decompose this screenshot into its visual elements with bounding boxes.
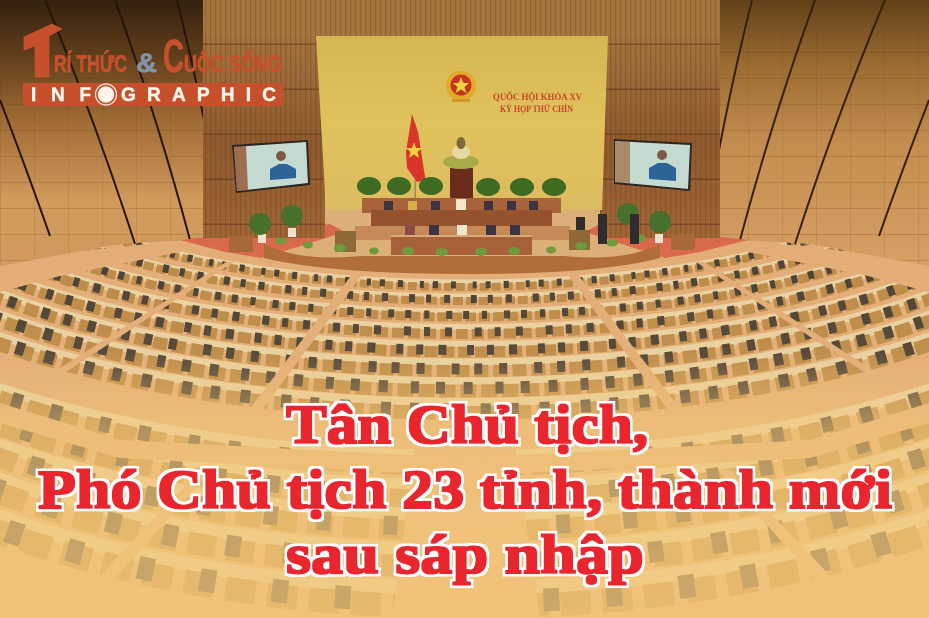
left video screen [232,140,310,193]
session heading on wall [493,90,582,114]
logo wordmark right: UỘC SỐNG [184,50,282,78]
right potted plants [617,203,695,250]
podium with bust and flowers [443,137,479,212]
golden back wall [316,36,608,210]
floor background [0,200,929,618]
session heading on wall: QUỐC HỘI KHÓA XV [493,90,582,103]
front curved rail [264,244,660,274]
logo O icon [96,84,116,105]
INF letters: INF [31,85,91,106]
lecterns [335,230,590,252]
presidium tables [355,198,570,255]
red carpet [180,224,748,258]
title: sau sáp nhập [286,524,644,585]
presidium officials [384,199,538,235]
national emblem [446,71,476,102]
flag of Vietnam [406,114,426,198]
logo: Tri Thuc & Cuoc Song [24,24,282,82]
right video screen [614,139,692,191]
logo wordmark left: RÍ THỨC [54,50,127,78]
logo large C: C [163,30,184,82]
GRAPHIC letters: GRAPHIC [121,85,276,106]
wooden top band [203,0,720,36]
session heading on wall: KỲ HỌP THỨ CHÍN [500,104,573,114]
stage floor [222,205,706,262]
wooden panel left [203,0,325,238]
logo letter T mark [24,24,62,77]
logo bar: INFOGRAPHIC [23,83,283,106]
title: Tân Chủ tịch, [286,394,648,455]
title [38,394,892,585]
logo ampersand: & [136,48,157,78]
aisles [0,236,929,618]
wooden panel right [600,0,720,238]
left potted plants [229,205,303,252]
row of plants [357,177,566,196]
small plants on rail [275,234,646,256]
right wall [706,0,929,266]
title: Phó Chủ tịch 23 tỉnh, thành mới [38,459,892,520]
standing figures [576,214,639,244]
yellow veil over seating [0,240,929,618]
left wall [0,0,222,266]
